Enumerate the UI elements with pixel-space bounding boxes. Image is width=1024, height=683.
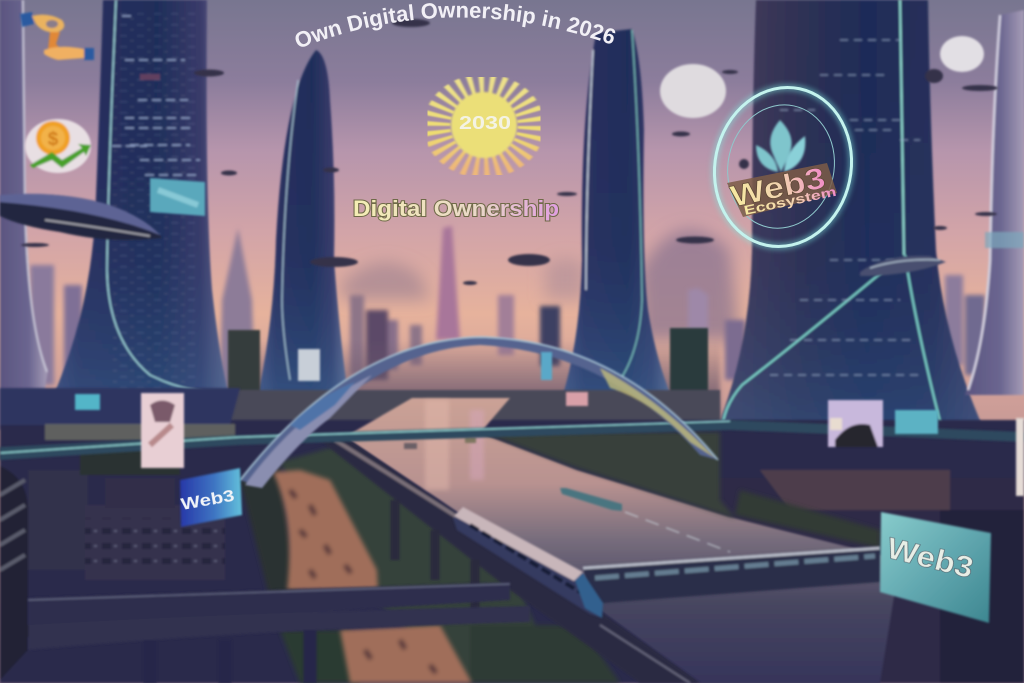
billboards on buildings [75,178,1024,623]
icon: hands exchanging coin [20,12,94,60]
badge label Web3: Web3 [728,162,828,214]
icon: sun with 2030 [437,86,531,166]
river boats [404,437,730,552]
tower: far left [0,0,48,430]
badge label Ecosystem: Ecosystem [743,184,838,218]
riverbank greenery [240,432,880,683]
river reflections [425,400,484,490]
tower: left main [40,0,236,424]
elevated rail viaduct [322,437,700,683]
badge glow ring [700,75,866,259]
icon: teal lotus [756,120,805,172]
soft clouds [340,229,740,340]
tower: center right [562,29,672,398]
tower: center left [258,50,348,395]
distant skyline [30,226,985,435]
tower: right main [719,0,987,478]
icon: coin with growth arrow: $ [48,129,59,150]
small flying vehicles [21,19,998,285]
decorative white ovals [660,36,984,118]
flying saucer: large left [0,194,162,240]
crowded avenue [273,470,472,683]
mid buildings [228,328,720,428]
icon: coin with growth arrow [25,119,91,173]
billboard label: Web3 right: Web3 [883,532,977,585]
arch bridge [240,337,718,488]
billboard label: Web3 left: Web3 [179,486,236,514]
river [345,398,900,683]
bullet train [453,507,603,618]
flying saucer: right [860,256,946,276]
highways [0,420,1024,683]
ground city [0,388,1024,683]
badge: Web3 Ecosystem [700,75,866,259]
tower: far right [965,10,1024,395]
badge label plate [727,163,837,217]
heading: Digital Ownership: Digital Ownership [353,196,559,221]
sun year label: 2030 [459,113,511,133]
